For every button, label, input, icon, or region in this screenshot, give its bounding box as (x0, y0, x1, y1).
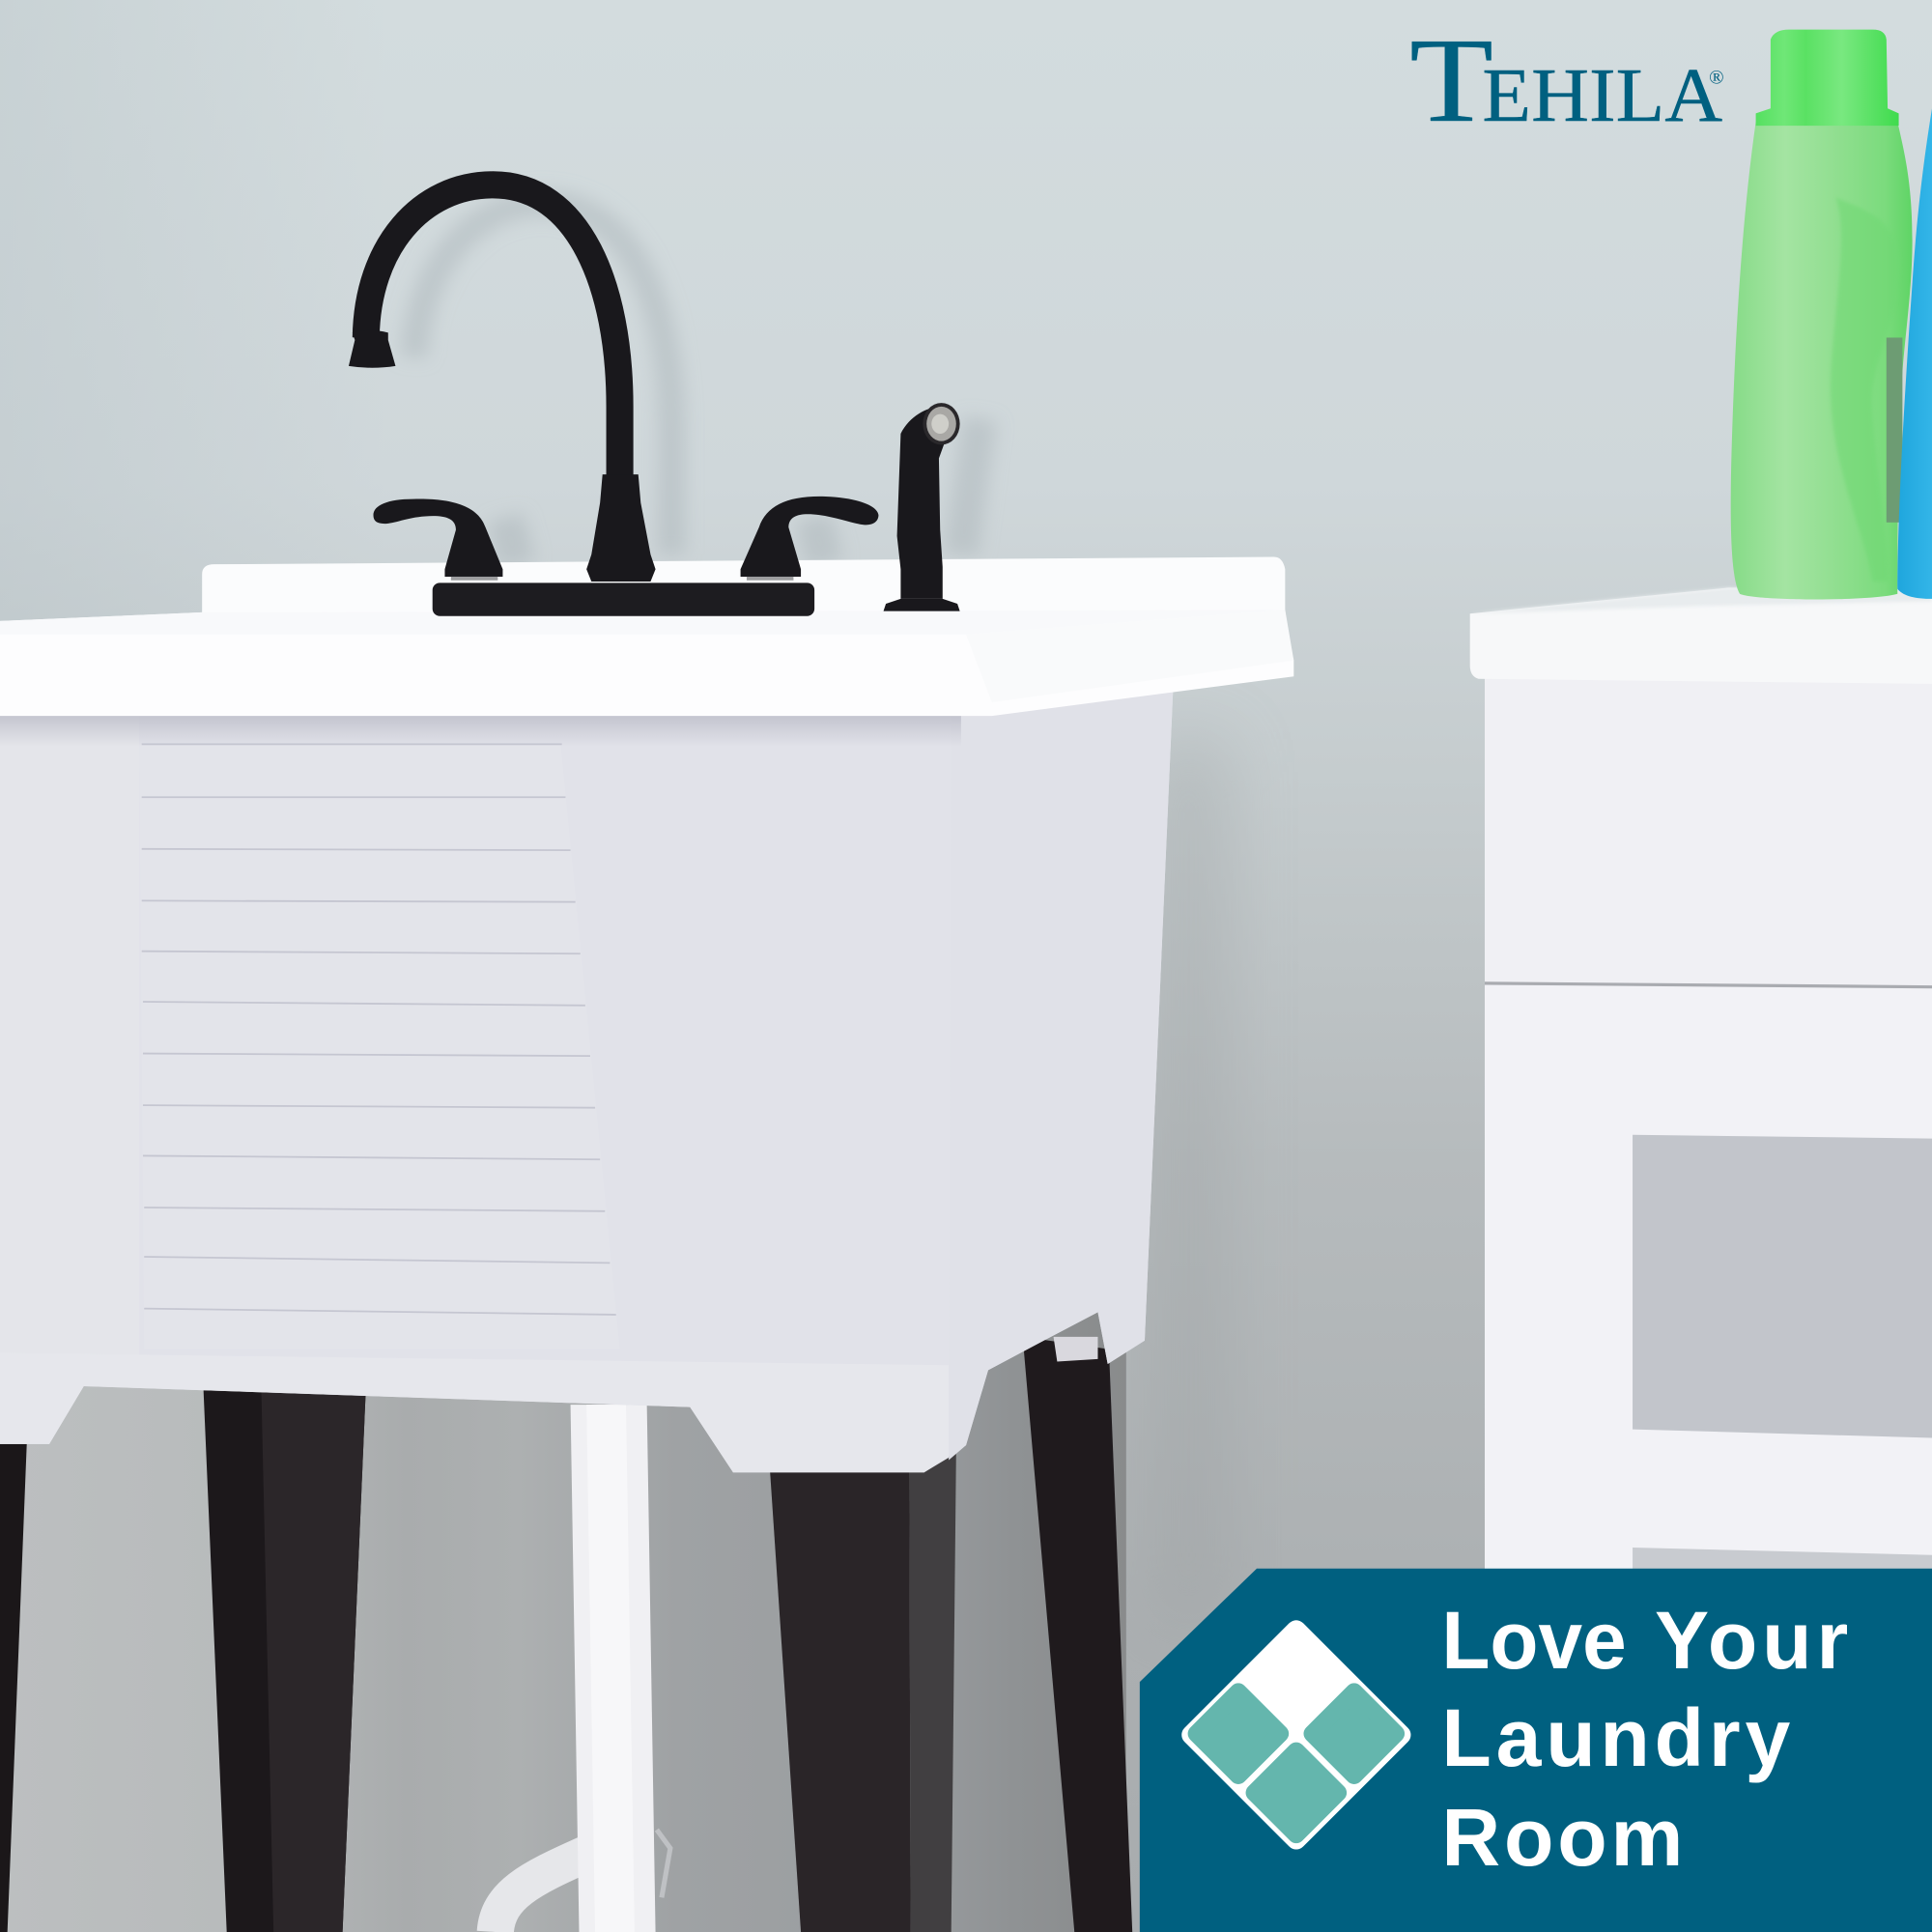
cabinet top (1470, 587, 1932, 684)
bottle grip recess (1831, 197, 1900, 582)
right handle chrome ring (747, 577, 793, 581)
registered mark: ® (1709, 68, 1724, 89)
cabinet drawer (1485, 678, 1932, 985)
tub body (0, 692, 1173, 1472)
tub bottom lip (0, 1353, 949, 1472)
basin top surface (0, 610, 1285, 635)
sink rim (0, 610, 1293, 716)
left front leg (203, 1386, 366, 1932)
bottle cap (1756, 30, 1899, 126)
blue bottle (1897, 108, 1932, 599)
lower glass panel (1633, 1548, 1932, 1577)
far left leg (0, 1435, 27, 1932)
heading: Love Your Laundry Room: Love (1441, 1595, 1627, 1686)
brand logo: Tehila: T (1409, 14, 1493, 148)
wall behind legs under the sink (0, 1293, 1126, 1932)
sink tub (0, 557, 1293, 1472)
cabinet door (1485, 982, 1932, 1574)
tub side face (949, 692, 1173, 1460)
heading: Love Your Laundry Room: Laundry (1441, 1692, 1791, 1783)
side sprayer (884, 403, 960, 611)
bottle label edge (1887, 337, 1902, 523)
drain pipe (496, 1405, 670, 1932)
rear backsplash (202, 557, 1285, 616)
heading: Love Your Laundry Room: Room (1441, 1792, 1683, 1883)
brand logo: Tehila (1409, 14, 1724, 148)
washboard panel (139, 744, 620, 1350)
faucet shadow on wall (414, 203, 980, 564)
icon: diamond tiles (1191, 1631, 1401, 1839)
left handle (373, 498, 502, 577)
brand logo: Tehila: EHILA (1482, 54, 1722, 138)
rear right leg (1023, 1337, 1132, 1932)
shadow under rim (0, 715, 961, 747)
frosted glass panel (1633, 1135, 1932, 1438)
deck plate (433, 582, 814, 616)
left handle chrome ring (451, 577, 497, 581)
rim side face (966, 610, 1293, 702)
nozzle (349, 330, 395, 368)
heading: Love Your Laundry Room (1441, 1595, 1848, 1883)
cabinet (1470, 587, 1932, 1577)
green detergent bottle (1731, 30, 1913, 600)
faucet (349, 185, 960, 616)
callout panel (1140, 1569, 1932, 1932)
panel background (1140, 1569, 1932, 1932)
tub left face (0, 715, 139, 1355)
spout base (586, 474, 656, 582)
right front leg (769, 1454, 956, 1932)
sink legs (0, 1337, 1132, 1932)
right handle (741, 497, 878, 577)
heading: Love Your Laundry Room: Your (1655, 1595, 1848, 1686)
bottle body (1731, 122, 1913, 600)
spout (366, 185, 620, 483)
